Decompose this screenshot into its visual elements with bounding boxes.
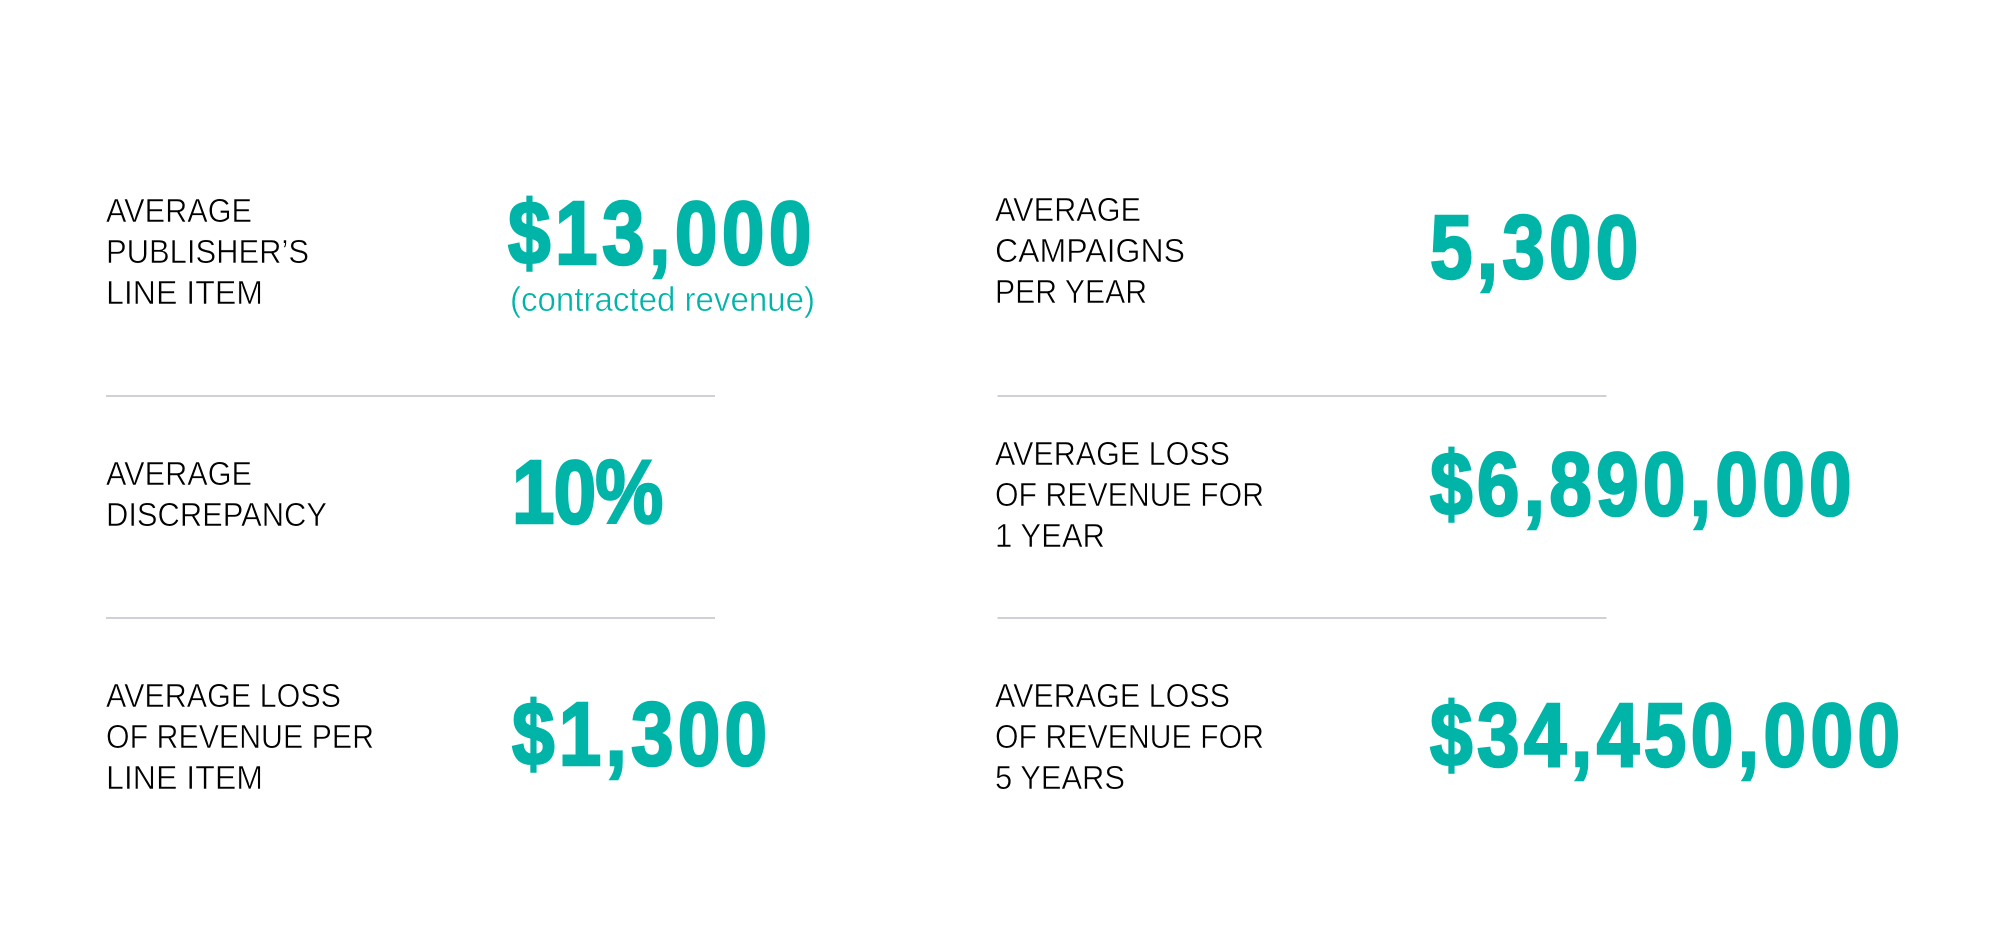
value: $1,300: $1,300 [512,683,767,784]
value: $13,000 contracted revenue: $13,000 [508,182,811,283]
label: average publisher's line item [106,192,309,311]
label: average loss for 5 years: 5 YEARS [995,759,1125,796]
label: average loss per line item: LINE ITEM [106,759,263,796]
label: average discrepancy: AVERAGE [106,455,252,492]
value: 10%: 10% [512,441,663,542]
label: average campaigns per year: AVERAGE [995,191,1141,228]
label: average loss per line item: AVERAGE LOSS [106,677,341,714]
label: average publisher's line item: LINE ITEM [106,274,263,311]
label: average loss per line item: OF REVENUE PER [106,718,374,755]
label: average loss for 5 years: AVERAGE LOSS [995,677,1230,714]
label: average campaigns per year [995,191,1185,310]
value: 5,300: 5,300 [1430,196,1638,297]
label: average loss for 1 year: 1 YEAR [995,517,1105,554]
value: $13,000 contracted revenue: (contracted revenue) [510,281,815,319]
label: average loss for 5 years [995,677,1264,796]
value: $34,450,000: $34,450,000 [1430,684,1900,785]
label: average loss per line item [106,677,374,796]
value: $6,890,000: $6,890,000 [1430,433,1852,534]
label: average publisher's line item: PUBLISHER’S [106,233,309,270]
label: average loss for 1 year: AVERAGE LOSS [995,435,1230,472]
label: average discrepancy: DISCREPANCY [106,496,327,533]
label: average discrepancy [106,455,327,533]
label: average campaigns per year: PER YEAR [995,273,1147,310]
label: average loss for 1 year: OF REVENUE FOR [995,476,1264,513]
label: average loss for 5 years: OF REVENUE FOR [995,718,1264,755]
label: average campaigns per year: CAMPAIGNS [995,232,1185,269]
label: average loss for 1 year [995,435,1264,554]
label: average publisher's line item: AVERAGE [106,192,252,229]
